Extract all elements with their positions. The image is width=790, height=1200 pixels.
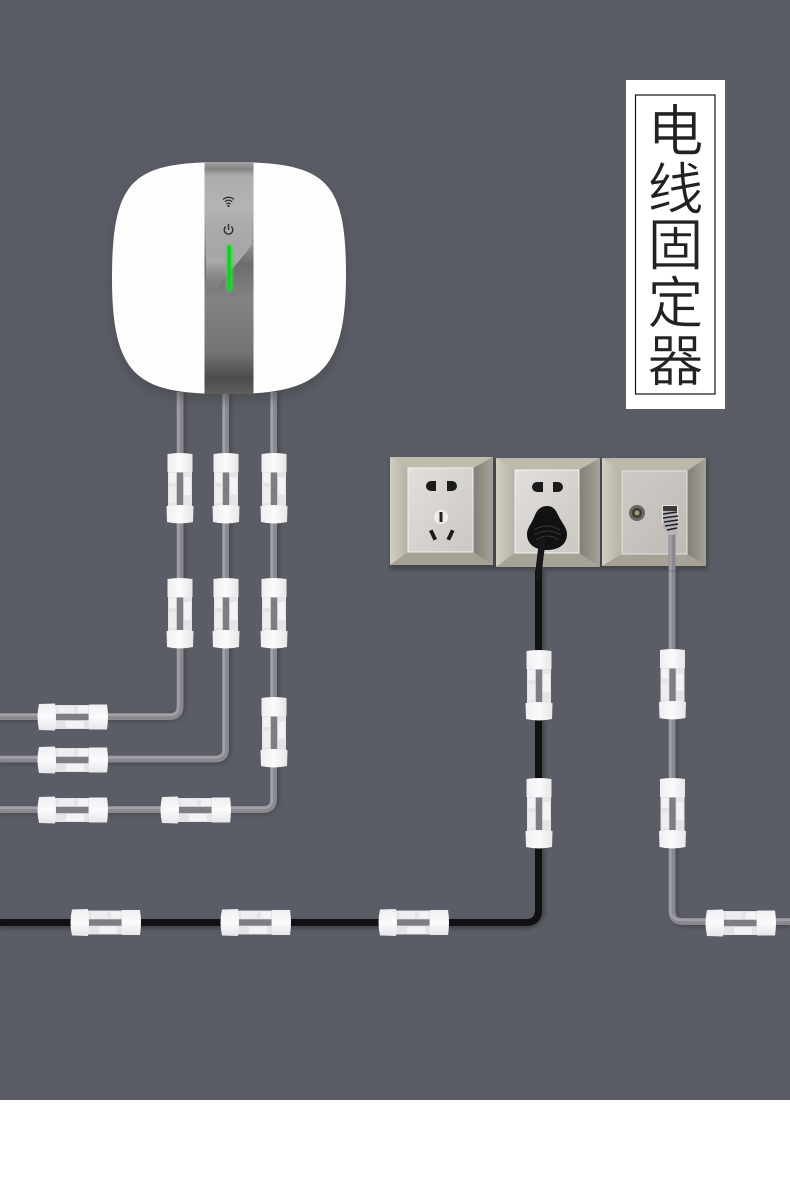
band diagonal highlight [206,200,252,288]
router white body [112,162,346,394]
power icon [224,224,233,234]
horizontal clips on router cables [38,704,231,824]
title text: 电 [648,100,704,163]
black plug [527,506,567,550]
router metal band [204,162,254,394]
plug cord over plate [538,538,543,580]
title text: 定 [648,272,704,335]
coaxial TV port [629,505,645,521]
title text [648,100,704,393]
title panel [626,80,725,409]
cable: black power cord [0,570,541,925]
vertical clips on router cables [166,453,288,768]
socket plate 2: outlet with plug [496,458,600,580]
bottom white strip [0,1100,790,1200]
cable: grey network cord [670,560,790,924]
cable: router to left, middle [0,392,228,761]
wall sockets [390,457,708,580]
network port with RJ45 plug [662,505,678,570]
router device [112,162,346,400]
socket plate 1: five-hole outlet [390,457,493,565]
clips on black power cord [70,650,552,936]
cable: router to left, bottom [0,392,276,811]
title text: 线 [648,158,704,221]
socket plate 3: TV and network outlet [602,458,706,570]
green indicator light [226,244,232,291]
cable: router to left, top [0,392,182,718]
title text: 器 [648,330,704,393]
title text: 固 [648,214,704,277]
clips on grey network cord [659,649,776,936]
wifi icon [223,197,234,206]
